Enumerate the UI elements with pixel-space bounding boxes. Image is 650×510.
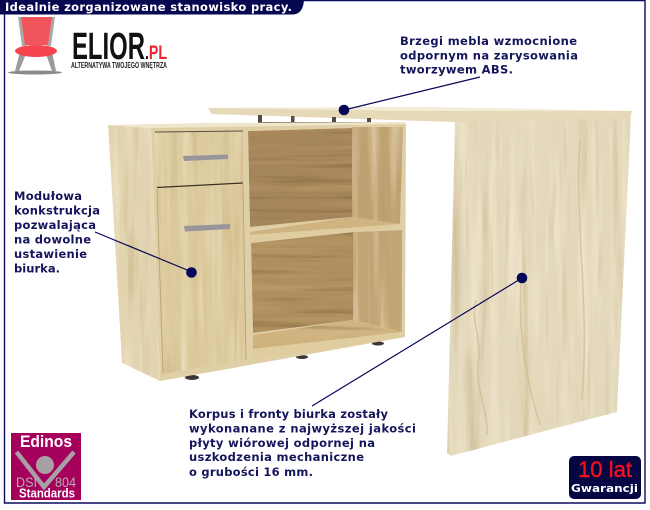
- brand name: ELIOR: [72, 26, 145, 68]
- callout text: [400, 34, 578, 76]
- callout text: [14, 189, 100, 276]
- right inner wall lower: [353, 230, 402, 332]
- logo: Elior.pl: [8, 17, 167, 74]
- DSI label: DSI: [16, 474, 37, 490]
- warranty: Gwarancji: [571, 483, 638, 495]
- leader line: [344, 77, 480, 110]
- callout: modular construction: [14, 189, 197, 278]
- callout text: pozwalająca: [14, 218, 96, 232]
- title bar: Idealnie zorganizowane stanowisko pracy.: [5, 0, 292, 14]
- badge title: Edinos: [20, 432, 72, 451]
- callout text: tworzywem ABS.: [400, 62, 513, 76]
- desk side panel: [447, 117, 631, 456]
- callout text: konkstrukcja: [14, 204, 100, 218]
- callout text: Korpus i fronty biurka zostały: [189, 407, 388, 421]
- badge: 10 lat Gwarancji: [569, 456, 641, 499]
- callout text: odpornym na zarysowania: [400, 48, 578, 62]
- brand suffix: .PL: [145, 43, 167, 64]
- cabinet: [108, 122, 406, 381]
- callout: desk top edges: [339, 34, 578, 115]
- cabinet front frame: [151, 124, 406, 381]
- bottom front edge: [253, 332, 405, 359]
- cabinet feet: [185, 342, 384, 380]
- door handle: [184, 224, 230, 232]
- cabinet bottom: [253, 320, 402, 349]
- badge: Edinos DSI 804 Standards: [11, 432, 81, 500]
- back wall lower: [251, 232, 353, 333]
- callout text: biurka.: [14, 262, 60, 276]
- rotation supports: [258, 115, 371, 124]
- callout: body and fronts: [189, 273, 527, 479]
- leader line: [312, 278, 522, 406]
- desk top: [208, 107, 632, 122]
- marker dot: [186, 267, 197, 278]
- marker dot: [517, 273, 527, 283]
- callout text: wykonanane z najwyższej jakości: [189, 422, 416, 436]
- brand tagline: ALTERNATYWA TWOJEGO WNĘTRZA: [71, 61, 167, 70]
- back wall upper: [248, 128, 352, 227]
- callout text: o grubości 16 mm.: [189, 465, 313, 479]
- years: 10 lat: [578, 457, 632, 482]
- right inner wall upper: [352, 127, 403, 224]
- door: [157, 184, 246, 374]
- standards label: Standards: [19, 486, 75, 500]
- callout text: Brzegi mebla wzmocnione: [400, 34, 577, 48]
- drawer: [155, 131, 243, 188]
- desk illustration: [108, 107, 632, 456]
- cabinet outer side: [108, 125, 160, 381]
- 804 label: 804: [55, 474, 76, 490]
- cabinet top: [108, 122, 406, 128]
- icon: red chair: [8, 17, 62, 74]
- icon: V mark: [16, 452, 74, 487]
- icon: circle: [36, 456, 54, 474]
- callout text: uszkodzenia mechaniczne: [189, 450, 364, 464]
- leader line: [95, 232, 192, 272]
- marker dot: [339, 105, 349, 115]
- callout text: na dowolne: [14, 232, 91, 246]
- callout text: [189, 407, 416, 479]
- callout text: ustawienie: [14, 247, 87, 261]
- callout text: Modułowa: [14, 189, 82, 203]
- drawer handle: [183, 154, 228, 161]
- callout text: płyty wiórowej odpornej na: [189, 436, 375, 450]
- shelf: [250, 217, 400, 242]
